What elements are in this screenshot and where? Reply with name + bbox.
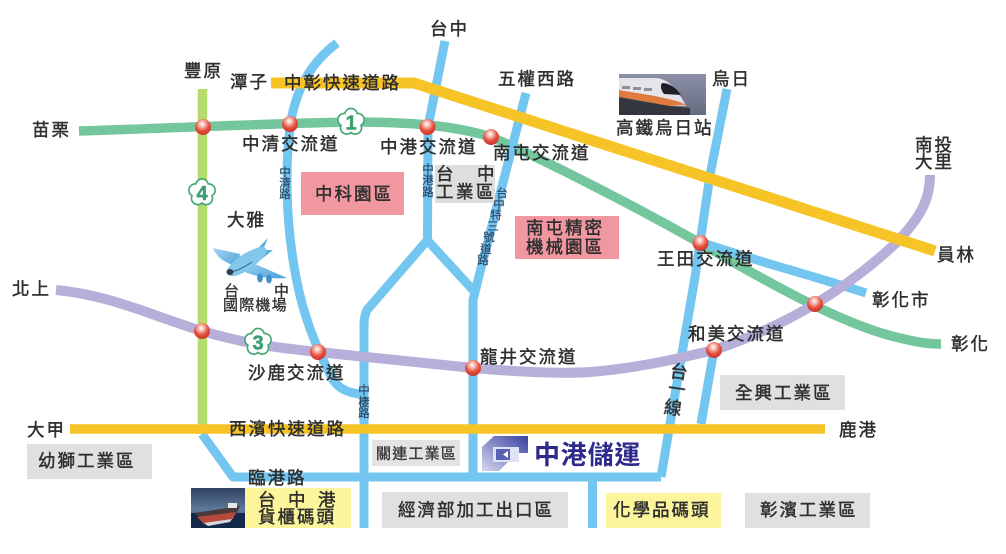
panel: Chemical Terminal	[606, 493, 721, 528]
text labels: place names: 大甲	[27, 420, 66, 440]
shield: highway 4	[189, 179, 215, 205]
road label: Taichung special No.3 road: 中	[493, 198, 505, 211]
text labels: interchanges: 王田交流道	[657, 249, 754, 269]
road label: Zhongqi Road	[358, 384, 370, 420]
road label: Provincial Highway 1: 線	[663, 397, 683, 419]
road label: Taichung special No.3 road: 號	[483, 231, 495, 244]
panel: Youshi Industrial Park	[27, 444, 152, 479]
road label: Taichung special No.3 road: 道	[480, 242, 492, 256]
text labels: place names: 大雅	[227, 210, 266, 230]
text labels: interchanges: 南屯交流道	[493, 143, 590, 163]
road: Wuquan West Road and special No.3 road	[473, 93, 526, 477]
text labels: airport: 中	[274, 283, 290, 300]
road label: Zhonggang Road	[422, 163, 434, 199]
photo: high speed rail train	[619, 74, 706, 115]
shield: highway 1: 1	[345, 112, 357, 134]
road label: Taichung special No.3 road	[477, 186, 508, 267]
road label: Taichung special No.3 road: 台	[496, 186, 508, 200]
text labels: interchanges: 沙鹿交流道	[248, 363, 346, 383]
road label: Provincial Highway 1	[663, 361, 689, 419]
road: Zhonggang branch	[427, 240, 473, 290]
photo: cargo ship	[191, 488, 245, 528]
text labels: place names: 南投	[915, 135, 954, 155]
road label: Zhongqi Road: 路	[358, 406, 370, 420]
text labels: place names: 五權西路	[498, 69, 576, 89]
road label: Zhongqing Road	[279, 166, 291, 201]
text labels: place names: 烏日	[712, 69, 751, 89]
text labels: place names: 彰化市	[872, 290, 930, 310]
road label: Taichung special No.3 road: 三	[487, 221, 499, 233]
shield: highway 3	[245, 328, 271, 354]
panel: Quanxing Industrial Park	[720, 375, 845, 410]
logo: Zhonggang Storage	[482, 436, 641, 471]
text: company name: 中港儲運	[534, 440, 641, 470]
road label: Zhongqi Road: 中	[358, 384, 370, 397]
road: Linggang Road	[202, 434, 661, 477]
road: Zhongqing Road	[287, 43, 360, 394]
panel: Quanxing Industrial Park: 全興工業區	[735, 383, 832, 403]
text labels: place names: 高鐵烏日站	[616, 118, 714, 138]
text labels: expressways and roads	[229, 73, 401, 488]
road label: Provincial Highway 1: 台	[669, 361, 689, 383]
panel: Taichung Industrial Park: 中	[477, 164, 494, 184]
text labels: place names: 苗栗	[32, 120, 71, 140]
text labels: place names: 大里	[915, 152, 954, 172]
road: Taichung to Zhonggang Road	[364, 41, 445, 528]
panel: Guanlian Industrial Park: 關連工業區	[376, 446, 457, 462]
road label: Zhonggang Road: 港	[422, 174, 434, 187]
road label: Zhonggang Road: 中	[422, 163, 434, 176]
panel: Export Processing Zone: 經濟部加工出口區	[398, 500, 554, 520]
label: terminal: 貨櫃碼頭	[258, 507, 336, 527]
panel: Guanlian Industrial Park	[372, 440, 460, 466]
panel: Changbin Industrial Park: 彰濱工業區	[760, 500, 858, 520]
panel: Central Taiwan Science Park: 中科園區	[315, 184, 393, 204]
road label: Zhongqing Road: 中	[279, 166, 291, 179]
road: highway 4 (lime)	[198, 89, 207, 434]
road: Changhua City branch	[703, 243, 866, 293]
text labels: place names	[12, 19, 990, 440]
road label: Zhongqing Road: 路	[279, 187, 291, 201]
text labels: expressways and roads: 西濱快速道路	[229, 419, 346, 439]
road: Zhongzhang expressway (yellow)	[271, 83, 935, 251]
road label: Zhonggang Road: 路	[422, 185, 434, 199]
road: Hemei branch	[701, 350, 714, 424]
text labels: expressways and roads: 中彰快速道路	[284, 73, 401, 93]
text labels: interchanges	[242, 134, 786, 383]
panel: Nantun Precision Machinery Park: 南屯精密	[526, 218, 604, 238]
road: Provincial Highway 1	[661, 89, 727, 477]
text labels: place names: 豐原	[184, 61, 223, 81]
road: West Coast expressway (yellow)	[70, 424, 825, 434]
interchange markers	[194, 116, 823, 376]
text labels: expressways and roads: 臨港路	[248, 468, 306, 488]
shield: highway 4: 4	[196, 183, 208, 205]
text labels: place names: 潭子	[230, 72, 269, 92]
text labels: place names: 北上	[12, 279, 51, 299]
road label: Provincial Highway 1: 一	[667, 378, 687, 400]
panel: Taichung Industrial Park: 工業區	[436, 182, 496, 202]
road: highway 1 (green)	[79, 122, 941, 344]
panel: Taichung Industrial Park	[435, 164, 496, 203]
text labels: interchanges: 中港交流道	[380, 137, 478, 157]
blue road network	[202, 41, 866, 528]
label: terminal	[245, 488, 351, 528]
panel: Export Processing Zone	[382, 492, 568, 528]
text labels: place names: 員林	[937, 245, 976, 265]
label: terminal: 台中港	[258, 490, 348, 510]
icon: airplane	[213, 238, 287, 284]
text labels: interchanges: 中清交流道	[242, 134, 340, 154]
road label: Zhongqing Road: 清	[279, 177, 291, 190]
road: south spur	[588, 477, 597, 528]
panel: Changbin Industrial Park	[745, 493, 870, 528]
panel: Central Taiwan Science Park	[301, 172, 404, 215]
text labels: airport: 台	[224, 283, 240, 300]
text labels: place names: 鹿港	[839, 420, 878, 440]
road label: Zhongqi Road: 棲	[358, 396, 370, 409]
text labels: interchanges: 龍井交流道	[480, 347, 578, 367]
text labels: airport	[223, 283, 290, 314]
panel: Nantun Precision Machinery Park: 機械園區	[526, 237, 604, 257]
text labels: place names: 彰化	[951, 334, 990, 354]
panel: Taichung Port Container Terminal	[191, 488, 351, 528]
shield: highway 3: 3	[252, 332, 264, 354]
text labels: airport: 國際機場	[223, 297, 288, 314]
text labels: interchanges: 和美交流道	[688, 324, 786, 344]
road label: Taichung special No.3 road: 路	[477, 253, 489, 267]
panel: Youshi Industrial Park: 幼獅工業區	[38, 451, 136, 471]
text labels: place names: 台中	[430, 19, 469, 39]
road label: Taichung special No.3 road: 特	[490, 208, 502, 222]
panel: Nantun Precision Machinery Park	[515, 216, 619, 259]
shield: highway 1	[338, 108, 364, 134]
panel: Taichung Industrial Park: 台	[436, 164, 454, 184]
icon: company mark	[482, 436, 528, 471]
panel: Chemical Terminal: 化學品碼頭	[613, 500, 710, 520]
road: highway 3 (purple)	[56, 175, 930, 373]
